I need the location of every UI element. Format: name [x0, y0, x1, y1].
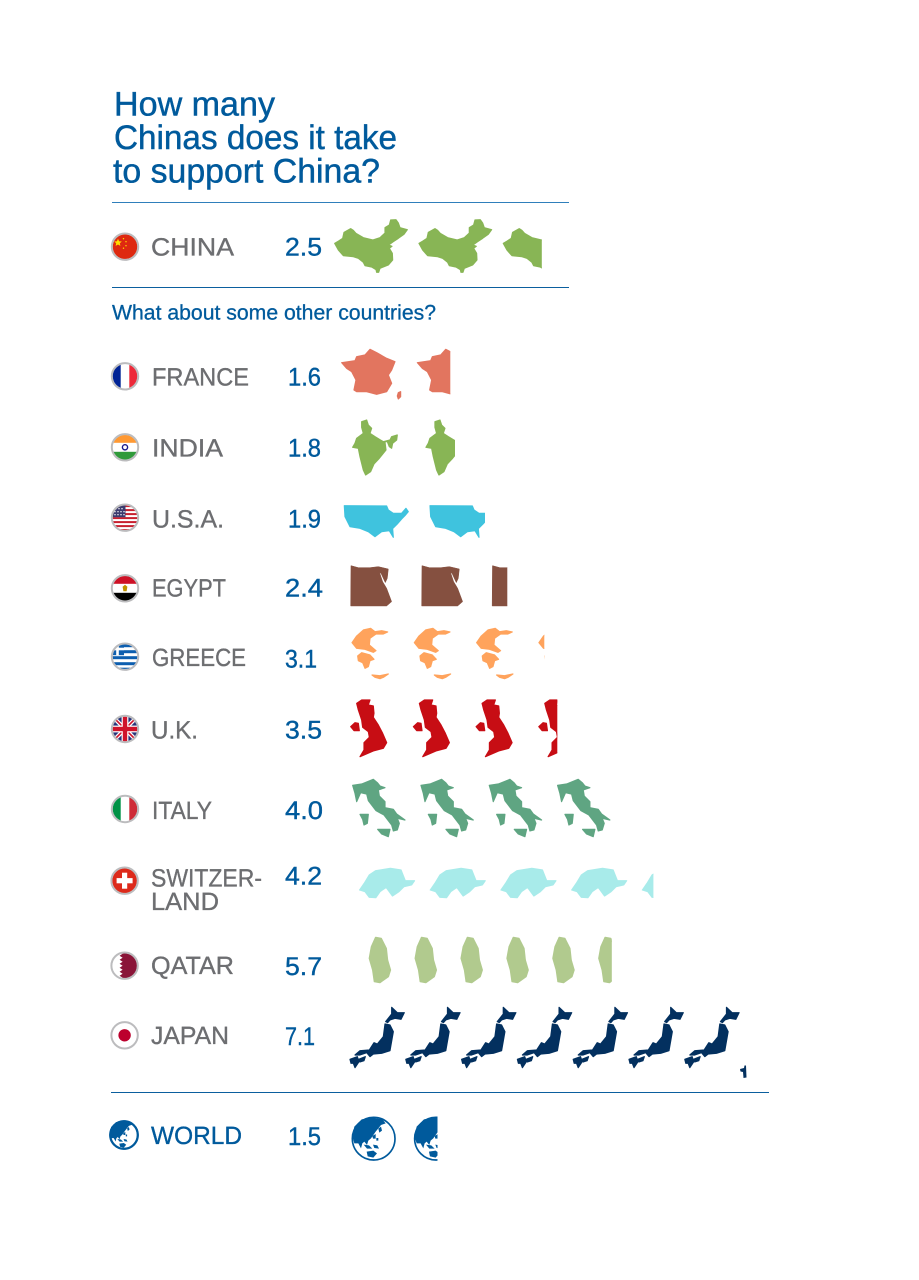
label: China: CHINA	[151, 234, 234, 262]
label: Qatar: QATAR	[151, 952, 234, 980]
flag: Italy	[111, 795, 139, 823]
flag: Switzerland	[111, 867, 139, 895]
label: Switzerland: SWITZER-	[151, 865, 262, 893]
icon: small globe	[110, 1121, 138, 1149]
label: France: FRANCE	[152, 364, 249, 392]
label: World: WORLD	[151, 1122, 242, 1150]
flag: Egypt	[111, 574, 139, 602]
row: India	[111, 420, 471, 475]
value: Qatar: 5.7	[285, 953, 322, 981]
flag: U.S.A.	[111, 504, 139, 532]
row: Switzerland	[110, 866, 654, 910]
pictogram: Egypt maps	[350, 565, 508, 606]
row: Japan	[111, 1007, 746, 1078]
pictogram: Italy maps	[353, 779, 610, 837]
label: Switzerland	[151, 865, 262, 916]
value: Japan: 7.1	[285, 1023, 315, 1051]
row: Greece	[111, 628, 575, 679]
title: How many	[114, 86, 275, 124]
flag: Japan	[111, 1022, 138, 1048]
pictogram: India maps	[353, 420, 471, 475]
pictogram: globes	[352, 1116, 438, 1161]
value: Italy: 4.0	[285, 797, 323, 825]
flag: Greece	[111, 643, 139, 671]
pictogram: U.S.A. maps	[344, 506, 494, 537]
subtitle: What about some other countries?	[112, 302, 436, 324]
title: Chinas does it take	[114, 119, 397, 157]
label: India: INDIA	[152, 435, 223, 463]
value: U.S.A.: 1.9	[288, 506, 321, 534]
row: China	[111, 220, 576, 272]
pictogram: Greece maps	[351, 628, 544, 680]
label: Egypt: EGYPT	[152, 575, 226, 603]
flag: China	[111, 233, 139, 261]
value: Greece: 3.1	[285, 646, 317, 674]
value: France: 1.6	[288, 364, 321, 392]
value: India: 1.8	[288, 435, 321, 463]
label: U.S.A.: U.S.A.	[152, 506, 224, 534]
row: World	[110, 1117, 457, 1160]
title: to support China?	[113, 152, 380, 190]
value: World: 1.5	[288, 1123, 321, 1151]
pictogram: China maps	[334, 219, 542, 273]
label: Greece: GREECE	[152, 644, 246, 672]
pictogram: U.K. maps	[351, 700, 575, 757]
title	[113, 86, 397, 190]
label: U.K.: U.K.	[151, 716, 198, 744]
flag: Qatar	[111, 952, 139, 980]
pictogram: Switzerland maps	[360, 868, 697, 898]
row: U.K.	[111, 700, 575, 757]
row: Egypt	[111, 566, 533, 606]
row: Italy	[111, 779, 610, 837]
value: U.K.: 3.5	[285, 716, 322, 744]
pictogram: Japan maps	[350, 1007, 746, 1078]
value: Egypt: 2.4	[285, 575, 323, 603]
label: Japan: JAPAN	[151, 1022, 229, 1050]
label: Italy: ITALY	[152, 797, 212, 825]
row: U.S.A.	[111, 504, 494, 537]
label: Switzerland: LAND	[151, 888, 219, 916]
flag: India	[111, 433, 139, 461]
value: Switzerland: 4.2	[285, 862, 322, 890]
flag: U.K.	[111, 715, 139, 743]
flag: France	[111, 362, 139, 390]
row: France	[111, 349, 476, 399]
pictogram: France maps	[341, 348, 450, 400]
pictogram: Qatar maps	[369, 937, 620, 983]
value: China: 2.5	[285, 234, 322, 262]
row: Qatar	[111, 937, 620, 983]
